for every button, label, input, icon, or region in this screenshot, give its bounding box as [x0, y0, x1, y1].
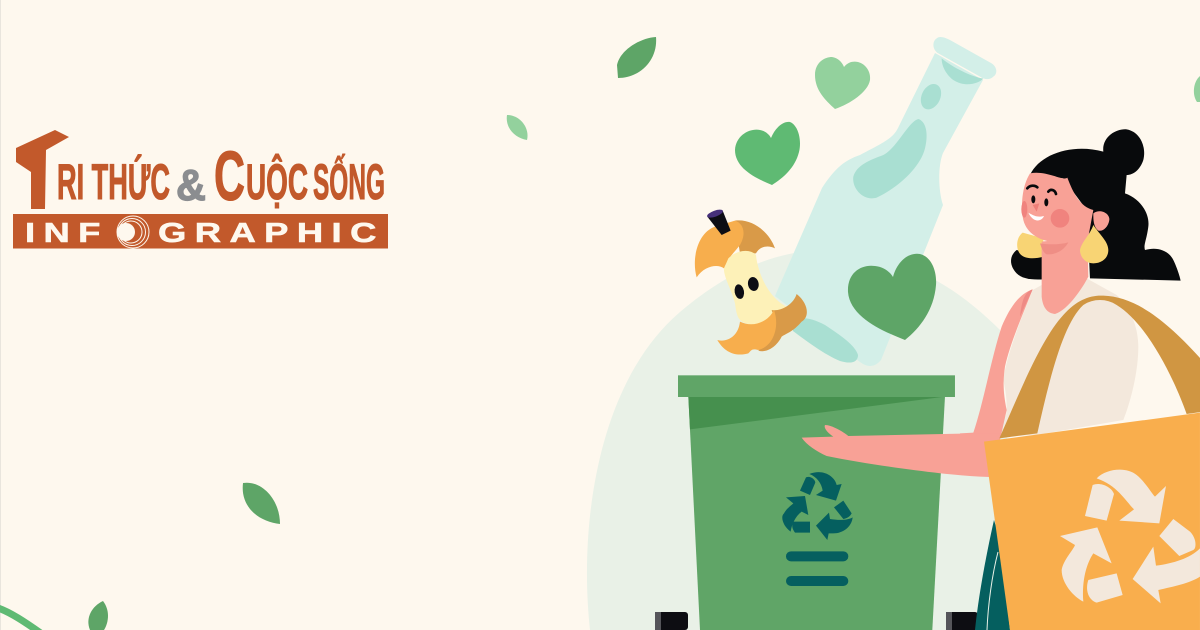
arm and hand [802, 425, 1000, 477]
icon: apple core [695, 208, 807, 355]
logo: Tri thức & Cuộc sống Infographic [13, 130, 388, 248]
wheels of the bin [655, 612, 978, 630]
illustration: woman [802, 129, 1200, 630]
hair [1011, 129, 1181, 281]
logo wordmark: Tri thức: RI THỨC [57, 154, 170, 210]
logo banner: INFOGRAPHIC [13, 214, 388, 248]
skirt [975, 520, 1010, 630]
earring [1080, 225, 1108, 263]
logo mark: large T [16, 130, 69, 209]
shirt [960, 278, 1138, 450]
logo wordmark: Cuộc sống: C [214, 137, 245, 215]
logo banner: INFOGRAPHIC: GRAPHIC [158, 217, 376, 248]
logo wordmark: Cuộc sống: UỘC [246, 153, 308, 210]
icon: recycle symbol on bag [1060, 470, 1200, 603]
face details [1021, 186, 1069, 228]
icon: recycle symbol on bin [782, 472, 853, 540]
icon: hearts [735, 57, 936, 340]
label bars on bin [786, 551, 848, 586]
logo ampersand: & [176, 161, 206, 210]
logo wordmark: Cuộc sống [214, 137, 385, 215]
logo: Tri thức & Cuộc sống Infographic: SỐNG [313, 153, 385, 210]
bag strap [999, 296, 1200, 438]
icon: yellow tote bag [984, 413, 1200, 630]
icon: glass bottle [775, 37, 996, 366]
logo banner: INFOGRAPHIC: INF [25, 217, 100, 248]
head and neck [1017, 173, 1109, 314]
icon: green recycling bin [678, 375, 955, 630]
background arch [587, 252, 1020, 630]
